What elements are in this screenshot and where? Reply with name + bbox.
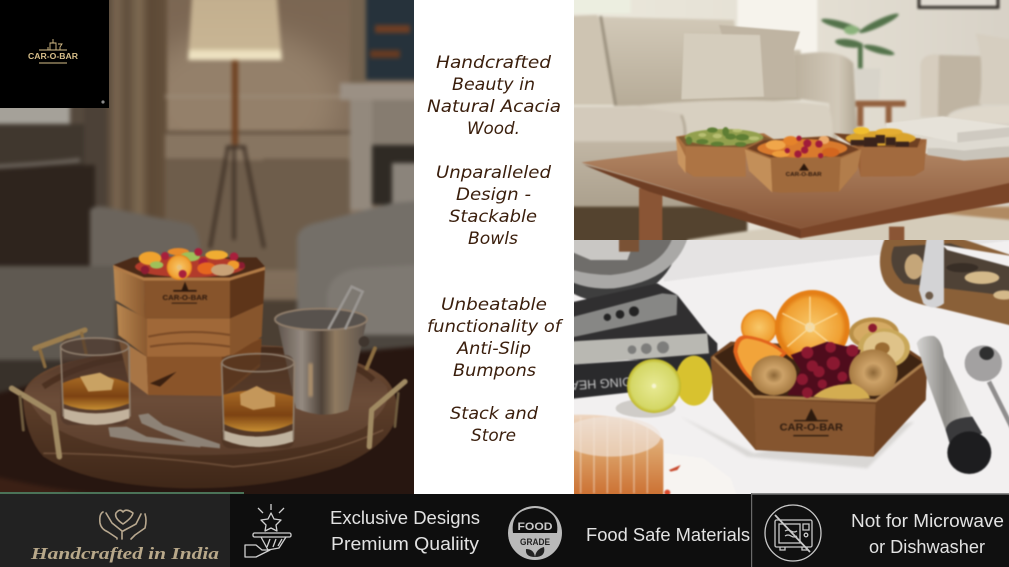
lemon and lime (616, 356, 712, 418)
muddler (917, 336, 991, 474)
text block: product benefits: Wood. (467, 119, 520, 139)
side table (856, 101, 906, 127)
lamp (188, 0, 282, 60)
logo wordmark: CAR-O-BAR (28, 51, 79, 61)
bowl back right: chocolate and mango (834, 133, 927, 177)
table legs (639, 188, 662, 243)
left armchair (0, 165, 95, 270)
text block: product benefits: Handcrafted (436, 53, 551, 73)
dark table (0, 344, 414, 494)
bowl left: pistachios (676, 132, 774, 156)
sofa (574, 14, 614, 106)
engraved logo: CAR-O-BAR (786, 172, 822, 178)
cocktail shaker bowl (574, 240, 688, 300)
fruit (135, 256, 245, 277)
text: exclusive designs: Exclusive Designs (330, 508, 480, 528)
text block: product benefits: Natural Acacia (427, 97, 561, 117)
label: handcrafted in India: Handcrafted in India (30, 544, 220, 563)
engraved logo: CAR-O-BAR (162, 293, 208, 302)
icon: star on serving tray (245, 504, 291, 557)
text block: product benefits: Bowls (468, 229, 518, 249)
badge: food grade: FOOD (518, 521, 553, 533)
right armchair (295, 200, 414, 310)
back dried apple (849, 317, 899, 349)
text block: product benefits: Stackable (449, 207, 537, 227)
coffee table (581, 163, 1009, 238)
text block: product benefits: Unbeatable (441, 295, 547, 315)
badge: food grade: GRADE (520, 537, 550, 548)
figs (751, 355, 797, 395)
armchair (937, 54, 982, 117)
text block: product benefits: Design - (456, 185, 531, 205)
tray top right (880, 233, 1009, 327)
icon: hands holding heart (100, 510, 146, 539)
engraved logo: CAR-O-BAR (780, 423, 843, 434)
text block: product benefits: Bumpons (453, 361, 536, 381)
text block: product benefits (427, 53, 564, 446)
logo panel (0, 0, 109, 108)
fruit bowl (681, 290, 927, 468)
icon: crossed-out microwave (765, 505, 821, 561)
pillows (681, 25, 800, 99)
text: food safe materials: Food Safe Materials (586, 525, 750, 545)
floor and rug (574, 205, 750, 240)
left glass (61, 338, 130, 425)
books and strainer: DING HEA (569, 374, 632, 392)
text block: product benefits: Unparalleled (436, 163, 551, 183)
banner: exclusive designs (230, 494, 752, 567)
icon: bar logo (39, 39, 67, 63)
banner: not for microwave (751, 493, 1009, 567)
text block: product benefits: Stack and (450, 404, 538, 424)
books and strainer (567, 283, 717, 399)
engraved logo (786, 163, 822, 178)
engraved logo (162, 282, 208, 304)
bar spoon (965, 345, 1009, 435)
text block: product benefits: Beauty in (452, 75, 535, 95)
photo: three bowls on coffee table in living room (574, 0, 1009, 240)
plant (820, 11, 900, 70)
text: premium quality: Premium Qualiity (331, 534, 479, 554)
banner: handcrafted in India (0, 492, 244, 567)
right glass (222, 354, 294, 448)
playing cards (663, 464, 681, 494)
photo: hexagonal bowl with dried fruit on white table (561, 233, 1009, 502)
stacked bowls (113, 248, 265, 396)
apple ring (858, 328, 910, 368)
badge: food grade (508, 506, 562, 560)
bowl front: dried fruit (745, 135, 856, 160)
tray (12, 248, 405, 488)
tongs on tray (108, 413, 220, 448)
engraved logo (780, 408, 843, 436)
oranges (741, 309, 777, 345)
text block: product benefits: functionality of (427, 317, 564, 337)
photo: whisky tray with stacked hexagonal bowls (0, 0, 414, 494)
glass (574, 414, 664, 494)
magazines (927, 147, 1009, 161)
handles (12, 330, 405, 457)
ice bucket (275, 287, 369, 415)
text: not for microwave: Not for Microwave (851, 511, 1004, 531)
text block: product benefits: Anti-Slip (456, 339, 531, 359)
text block: product benefits: Store (471, 426, 516, 446)
cranberries (787, 342, 861, 397)
text: or dishwasher: or Dishwasher (869, 537, 985, 557)
